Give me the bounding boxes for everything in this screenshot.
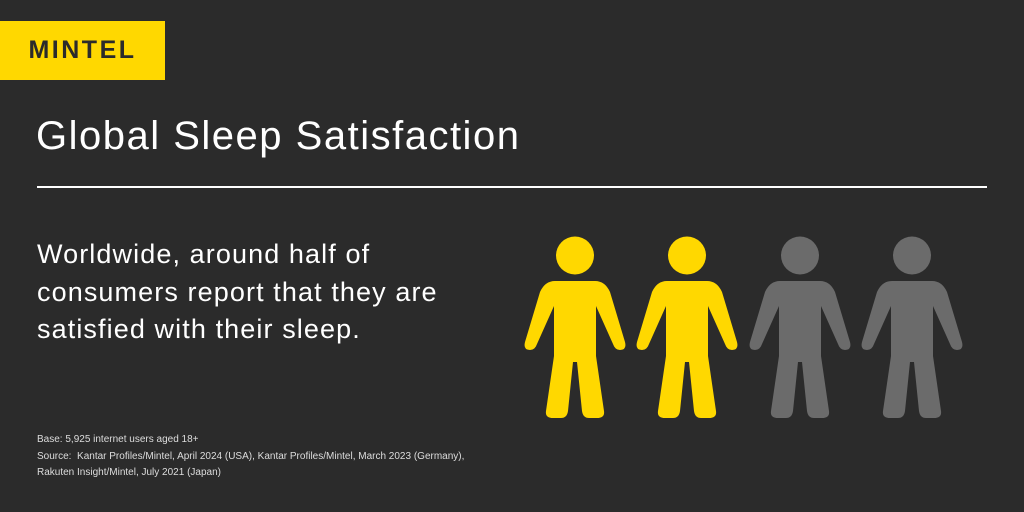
footer source	[37, 434, 464, 478]
body text: satisfied with their sleep.	[37, 314, 361, 344]
footer source: Rakuten Insight/Mintel, July 2021 (Japan)	[37, 467, 221, 478]
body text: consumers report that they are	[37, 276, 438, 306]
title: Global Sleep Satisfaction	[36, 114, 520, 158]
icon: person grey 1	[750, 236, 850, 418]
logo	[0, 21, 165, 80]
icon: person yellow 2	[637, 236, 737, 418]
body text: Worldwide, around half of	[37, 239, 370, 269]
logo: MINTEL	[28, 36, 137, 64]
icon: person grey 2	[862, 236, 962, 418]
body text	[37, 239, 438, 344]
footer source: Base: 5,925 internet users aged 18+	[37, 434, 199, 445]
icon: person yellow 1	[525, 236, 625, 418]
footer source: Source: Kantar Profiles/Mintel, April 2024 (USA), Kantar Profiles/Mintel, March 2023 (Germany),	[37, 450, 464, 462]
